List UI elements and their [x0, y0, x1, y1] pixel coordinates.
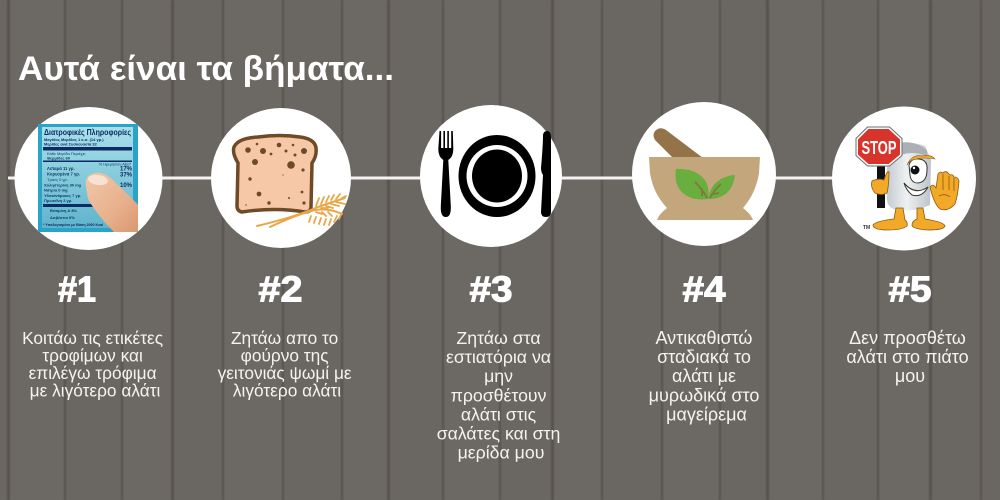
stop sign: [877, 164, 885, 208]
step 1: nutrition label icon: 37%: [120, 172, 133, 178]
trademark: TM: [863, 225, 870, 231]
step 1: nutrition label icon: Κορεσμένα 7 γρ.: [47, 172, 80, 176]
step 5: salt shaker with stop sign icon: [832, 106, 976, 250]
step 1: nutrition label icon: Νάτριο 0 mg: [44, 188, 68, 192]
step 1: nutrition label icon: Βιταμίνη Α 8%: [50, 208, 78, 213]
step 1 text: με λιγότερο αλάτι: [30, 380, 161, 400]
step 1: nutrition label icon: 10%: [120, 183, 133, 189]
step 1: nutrition label icon: Λιπαρά 11 γρ.: [47, 166, 75, 171]
step 2 number: #2: [258, 268, 302, 310]
knife: [541, 131, 551, 217]
step 3 text: προσθέτουν: [451, 386, 547, 406]
step 3 text: αλάτι στις: [461, 404, 536, 424]
feet: [873, 208, 945, 230]
step 1 text: τροφίμων και: [42, 346, 143, 366]
step 1: nutrition label icon: Κάθε Μερίδα Περιέχει: [47, 151, 85, 156]
step 4 text: μυρωδικά στο: [649, 386, 759, 406]
step 5: salt shaker with stop sign icon: STOP: [862, 138, 896, 158]
finger: [86, 173, 138, 232]
eye and face: [909, 159, 927, 183]
left hand: [871, 172, 889, 194]
step 1: nutrition label icon: Μερίδες ανά Συσκευασία 32: [44, 142, 98, 146]
step 3 text: μην: [484, 366, 513, 386]
step 1: nutrition label icon: Χοληστερίνη 30 mg: [44, 182, 82, 188]
step 2 text: γειτονιάς ψωμί με: [218, 363, 352, 383]
step 4 text: μαγείρεμα: [666, 404, 747, 424]
step 5 text: μου: [895, 366, 925, 386]
step 1 text: Κοιτάω τις ετικέτες: [22, 328, 163, 348]
step 1: nutrition label icon: % Ημερήσιαν Αξία*: [99, 162, 132, 166]
step 3 number: #3: [470, 268, 512, 310]
timeline connector line: [8, 176, 834, 180]
step 5 number: #5: [888, 268, 932, 310]
step 1: nutrition label icon: Θερμίδες 60: [47, 156, 71, 160]
step 4: mortar and herbs icon: [632, 102, 776, 246]
step 4 text: Αντικαθιστώ: [655, 328, 752, 348]
step 1: nutrition label icon: [14, 107, 162, 250]
step 4 text: αλάτι με: [672, 366, 736, 386]
step 3: plate and cutlery icon: [420, 105, 562, 247]
pestle: [654, 128, 703, 158]
bread slice: [234, 136, 316, 212]
step 1: nutrition label icon: Ασβέστιο 0%: [50, 215, 75, 220]
step 5 text: αλάτι στο πιάτο: [846, 347, 969, 367]
step 1: nutrition label icon: Τρανς 0 γρ.: [47, 177, 68, 182]
wheat: [257, 194, 346, 227]
step 2 text: λιγότερο αλάτι: [233, 380, 341, 400]
title: Αυτά είναι τα βήματα...: [18, 50, 394, 88]
step 1: nutrition label icon: * Υπολογισμένο με Βάση 2000 Kcal: [43, 223, 103, 227]
step 4 number: #4: [682, 268, 726, 310]
step 1: nutrition label icon: Πρωτεΐνη 2 γρ.: [44, 198, 72, 203]
step 3 text: σαλάτες και στη: [437, 424, 560, 444]
step 3 text: μερίδα μου: [458, 442, 544, 462]
plate: [458, 135, 536, 217]
right hand: [930, 172, 959, 210]
mortar bowl: [649, 157, 760, 220]
fork: [438, 131, 453, 217]
step 1: nutrition label icon: Μεγέθος Μερίδας 1 κ.σ. (14 γρ.): [44, 137, 104, 142]
leaves: [675, 169, 709, 200]
step 2 text: Ζητάω απο το: [231, 328, 338, 348]
step 2: bread icon: [211, 108, 351, 248]
step 3 text: Ζητάω στα: [456, 328, 541, 348]
step 1 number: #1: [58, 268, 96, 310]
step 1: nutrition label icon: Υδατάνθρακες 7 γρ.: [44, 193, 81, 198]
step 5 text: Δεν προσθέτω: [849, 328, 966, 348]
step 2 text: φούρνο της: [241, 346, 329, 366]
step 1 text: επιλέγω τρόφιμα: [29, 363, 157, 383]
shaker body: [887, 143, 931, 210]
step 1: nutrition label icon: Διατροφικές Πληροφορίες: [44, 128, 131, 137]
step 1: nutrition label icon: 17%: [120, 166, 133, 172]
step 4 text: σταδιακά το: [657, 347, 751, 367]
step 3 text: εστιατόρια να: [446, 347, 551, 367]
